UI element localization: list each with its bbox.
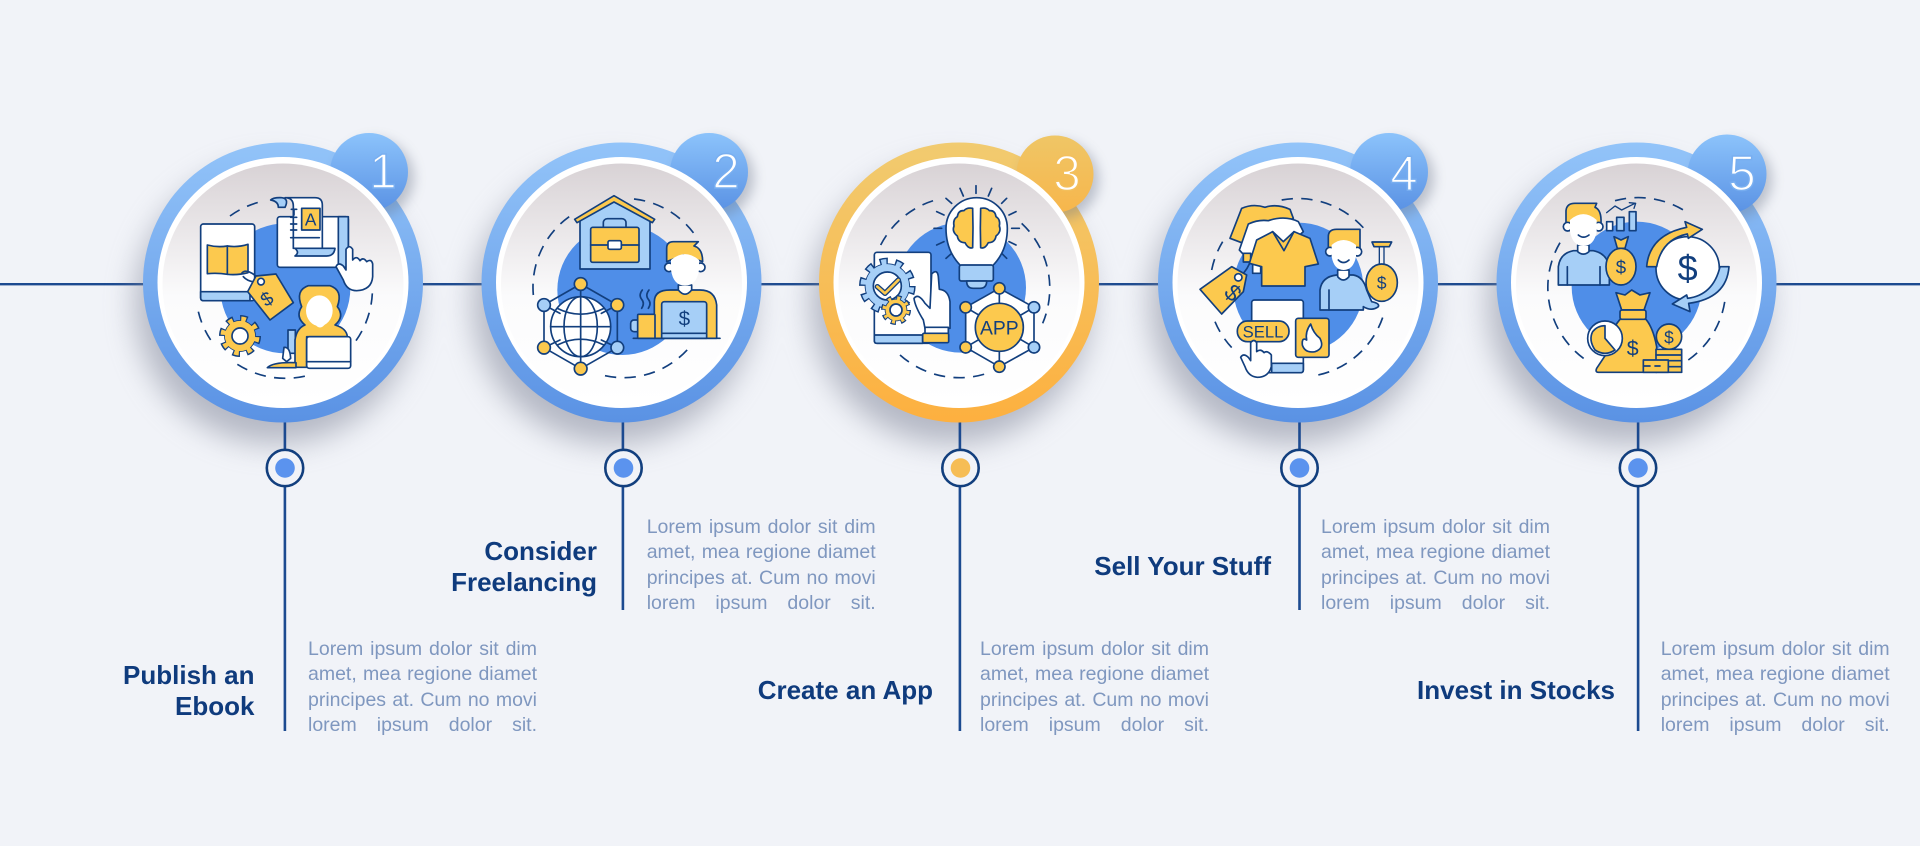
badge: step 2 — [670, 133, 748, 211]
text block: step 2 body — [647, 516, 876, 614]
icon: selling your stuff — [1200, 199, 1397, 377]
heading: Publish an Ebook: Ebook — [175, 690, 254, 720]
heading: Sell Your Stuff: Sell Your Stuff — [1094, 550, 1271, 580]
marker: step 3 — [942, 450, 979, 486]
horizontal timeline line — [0, 283, 1920, 285]
panel: step 3 circle — [819, 136, 1099, 422]
badge: step 4 — [1350, 133, 1428, 211]
text block: step 4 body: principes at. Cum no movi — [1321, 566, 1550, 588]
connector: step 5 — [1637, 420, 1639, 731]
text block: step 1 body — [308, 638, 537, 736]
marker: step 2 — [605, 450, 642, 486]
text block: step 5 body: Lorem ipsum dolor sit dim — [1661, 638, 1890, 660]
text block: step 2 body: principes at. Cum no movi — [647, 566, 876, 588]
text block: step 4 body — [1321, 516, 1550, 614]
heading: Create an App: Create an App — [758, 674, 933, 704]
shadows under circles — [135, 164, 1768, 444]
heading: Invest in Stocks: Invest in Stocks — [1417, 674, 1615, 704]
text block: step 2 body: lorem ipsum dolor sit. — [647, 592, 876, 614]
icon: selling your stuff: SELL — [1243, 322, 1283, 341]
icon: freelancing from home — [533, 196, 720, 378]
badge: step 5 — [1688, 134, 1766, 214]
badge: step 1 — [330, 133, 408, 211]
badge: step 5: 5 — [1728, 147, 1756, 201]
text block: step 3 body — [980, 638, 1209, 736]
heading: Publish an Ebook — [123, 660, 254, 720]
text block: step 3 body: lorem ipsum dolor sit. — [980, 714, 1209, 736]
icon: creating an app: APP — [980, 318, 1019, 339]
text block: step 5 body: principes at. Cum no movi — [1661, 688, 1890, 710]
text block: step 3 body: Lorem ipsum dolor sit dim — [980, 638, 1209, 660]
connector: step 2 — [622, 420, 624, 610]
text block: step 3 body: principes at. Cum no movi — [980, 688, 1209, 710]
icon: creating an app — [863, 186, 1050, 378]
text block: step 1 body: lorem ipsum dolor sit. — [308, 714, 537, 736]
icon: publishing an ebook — [198, 198, 373, 378]
badge: step 3 — [1016, 136, 1094, 212]
connector: step 1 — [284, 420, 286, 731]
text block: step 2 body: Lorem ipsum dolor sit dim — [647, 516, 876, 538]
icon: investing in stocks — [1548, 198, 1729, 372]
panel: step 1 circle — [143, 133, 423, 422]
text block: step 1 body: Lorem ipsum dolor sit dim — [308, 638, 537, 660]
badge: step 3: 3 — [1053, 147, 1081, 201]
icon: investing in stocks: $ — [1678, 248, 1698, 289]
panel: step 5 circle — [1496, 134, 1776, 422]
badge: step 1: 1 — [369, 145, 397, 199]
icon: selling your stuff: $ — [1219, 279, 1247, 306]
text block: step 1 body: principes at. Cum no movi — [308, 688, 537, 710]
heading: Consider Freelancing: Consider — [484, 536, 597, 566]
text block: step 4 body: lorem ipsum dolor sit. — [1321, 592, 1550, 614]
panel: step 4 circle — [1158, 133, 1438, 422]
connector: step 3 — [959, 420, 961, 731]
icon: freelancing from home: $ — [679, 308, 691, 331]
heading: Publish an Ebook: Publish an — [123, 660, 254, 690]
marker: step 5 — [1620, 450, 1656, 486]
marker: step 1 — [267, 450, 303, 486]
text block: step 2 body: amet, mea regione diamet — [647, 541, 876, 563]
heading: Consider Freelancing: Freelancing — [451, 566, 597, 596]
text block: step 3 body: amet, mea regione diamet — [980, 663, 1209, 685]
icon: investing in stocks: $ — [1627, 336, 1639, 360]
icon: investing in stocks: $ — [1664, 327, 1674, 347]
connector: step 4 — [1298, 420, 1301, 610]
text block: step 5 body: amet, mea regione diamet — [1661, 663, 1890, 685]
icon: investing in stocks: $ — [1616, 256, 1627, 277]
panel: step 2 circle — [482, 133, 762, 422]
badge: step 4: 4 — [1390, 147, 1418, 201]
text block: step 5 body: lorem ipsum dolor sit. — [1661, 714, 1890, 736]
heading: Consider Freelancing — [451, 536, 597, 596]
text block: step 4 body: Lorem ipsum dolor sit dim — [1321, 516, 1550, 538]
marker: step 4 — [1281, 450, 1318, 486]
text block: step 5 body — [1661, 638, 1890, 736]
text block: step 1 body: amet, mea regione diamet — [308, 663, 537, 685]
icon: publishing an ebook: A — [305, 209, 317, 229]
icon: publishing an ebook: $ — [257, 288, 278, 312]
badge: step 2: 2 — [712, 145, 740, 199]
icon: selling your stuff: $ — [1377, 273, 1387, 293]
text block: step 4 body: amet, mea regione diamet — [1321, 541, 1550, 563]
